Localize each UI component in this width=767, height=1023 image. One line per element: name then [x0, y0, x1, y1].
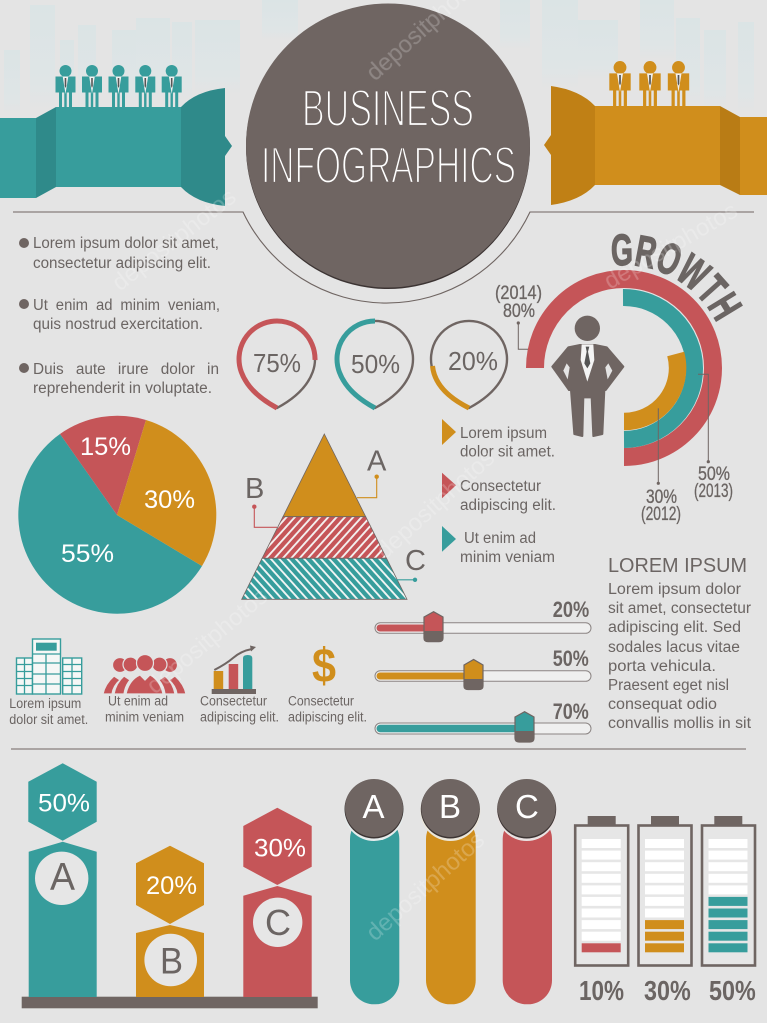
pin gauge 75%	[239, 321, 315, 408]
label C: C	[405, 545, 426, 577]
pie chart: 30%	[144, 486, 195, 514]
slider 70%	[375, 699, 591, 742]
battery 10%: 10%	[579, 975, 624, 1006]
tube C	[497, 779, 557, 1004]
2013 label: (2013)	[694, 481, 733, 502]
tube C: C	[515, 788, 539, 825]
icon: bar chart with arrow: Consectetur	[200, 694, 267, 709]
icon: dollar sign: $	[312, 640, 336, 693]
pin gauge 50%	[337, 321, 413, 408]
icon: dollar sign: adipiscing elit.	[288, 710, 367, 725]
triangle list: dolor sit amet.	[460, 444, 555, 461]
2012 label: (2012)	[641, 504, 681, 525]
2014 label: 80%	[503, 301, 535, 322]
growth chart	[495, 234, 743, 525]
2014 ring	[535, 279, 713, 457]
slider 50%	[375, 646, 591, 690]
icon: people group: minim veniam	[105, 710, 184, 725]
label B: B	[245, 473, 264, 505]
column A	[28, 763, 97, 997]
lorem ipsum text block: porta vehicula.	[608, 658, 716, 675]
column C: 30%	[254, 835, 306, 863]
slider 50%: 50%	[553, 646, 589, 671]
2012 ring	[624, 354, 678, 422]
stock watermark: depositphotos	[107, 183, 241, 297]
battery 50%	[702, 816, 756, 1006]
band tail	[0, 118, 36, 198]
battery 50%: 50%	[709, 975, 756, 1006]
title	[261, 80, 516, 195]
icon: office building	[9, 639, 88, 727]
businessman icon	[552, 316, 623, 436]
bullet list: reprehenderit in voluptate.	[33, 380, 212, 397]
lorem ipsum text block: consequat odio	[608, 696, 717, 713]
slider 70%: 70%	[553, 699, 589, 724]
column B: 20%	[146, 872, 197, 900]
title: INFOGRAPHICS	[261, 137, 516, 195]
stock watermark: depositphotos	[371, 444, 500, 564]
lorem ipsum text block: Lorem ipsum dolor	[608, 581, 741, 598]
column A: 50%	[38, 790, 90, 818]
left teal banner with team	[0, 65, 232, 206]
title: BUSINESS	[302, 80, 474, 138]
lorem ipsum text block: LOREM IPSUM	[608, 555, 747, 577]
column A: A	[50, 856, 75, 899]
pin gauge 50%: 50%	[351, 349, 400, 379]
2013 label	[694, 374, 733, 502]
triangle list: Consectetur	[460, 478, 541, 495]
band fold	[36, 107, 56, 198]
label B	[245, 473, 277, 527]
icon: bar chart with arrow: adipiscing elit.	[200, 710, 279, 725]
band main	[595, 106, 720, 185]
bullet list: Duis aute irure dolor in	[33, 361, 219, 378]
stock watermark: depositphotos	[600, 197, 742, 295]
stock watermark	[107, 0, 742, 946]
pie chart: 15%	[80, 433, 131, 461]
teal team	[56, 65, 182, 107]
pin gauge 75%: 75%	[253, 348, 301, 378]
slider 20%	[375, 597, 591, 642]
bullet list: Ut enim ad minim veniam,	[33, 297, 220, 314]
pyramid chart	[242, 434, 426, 599]
pin gauge 20%: 20%	[448, 346, 498, 376]
pie chart	[18, 416, 216, 614]
2012 label	[641, 408, 681, 525]
2014 label	[495, 283, 542, 349]
pin gauge 20%	[431, 321, 507, 408]
tube A	[344, 779, 404, 1004]
header divider with arc	[13, 212, 754, 303]
hexagon bar chart	[22, 763, 318, 1008]
band fold	[720, 106, 740, 195]
2013 label: 50%	[698, 464, 730, 485]
lorem ipsum text block: adipiscing elit. Sed	[608, 619, 741, 636]
slider 20%: 20%	[553, 597, 589, 622]
triangle list: Lorem ipsum	[460, 425, 547, 442]
triangle list: minim veniam	[460, 549, 555, 566]
2013 ring	[623, 297, 695, 440]
band cap	[544, 86, 595, 205]
icon: people group: Ut enim ad	[108, 694, 168, 709]
band main	[56, 107, 182, 187]
label C	[397, 545, 426, 582]
label A	[357, 446, 387, 498]
bullet list	[19, 235, 220, 397]
label A: A	[367, 446, 387, 478]
battery 30%	[638, 816, 692, 1006]
gold team	[609, 61, 689, 106]
icon: office building: dolor sit amet.	[9, 712, 88, 727]
column C: C	[265, 902, 291, 943]
icon: dollar sign: Consectetur	[288, 694, 354, 709]
stock watermark: depositphotos	[361, 826, 490, 946]
bullet list: Lorem ipsum dolor sit amet,	[33, 235, 219, 252]
column B	[136, 846, 204, 997]
2012 label: 30%	[646, 487, 677, 508]
band cap	[181, 88, 232, 206]
lorem ipsum text block: sit amet, consectetur	[608, 600, 751, 617]
tube B	[420, 779, 480, 1004]
triangle list: adipiscing elit.	[460, 497, 556, 514]
2014 label: (2014)	[495, 283, 542, 304]
baseline	[22, 997, 318, 1008]
lorem ipsum text block: convallis mollis in sit	[608, 715, 752, 732]
icon: people group	[103, 654, 186, 725]
battery 10%	[575, 816, 628, 1006]
battery 30%: 30%	[644, 975, 691, 1006]
stock watermark: depositphotos	[142, 583, 273, 700]
background city skyline	[4, 0, 754, 115]
right gold banner with team	[544, 61, 767, 205]
bullet list: quis nostrud exercitation.	[33, 316, 203, 333]
column C	[243, 808, 312, 997]
growth heading: GROWTH	[612, 234, 743, 322]
lorem ipsum text block: Praesent eget nisl	[608, 677, 729, 694]
triangle list	[442, 419, 556, 566]
bullet list: consectetur adipiscing elit.	[33, 255, 211, 272]
tube B: B	[439, 788, 461, 825]
pie chart: 55%	[61, 540, 114, 568]
column B: B	[160, 940, 183, 981]
tube A: A	[362, 788, 385, 825]
icon: office building: Lorem ipsum	[9, 696, 81, 711]
lorem ipsum text block: sodales lacus vitae	[608, 639, 740, 656]
title circle	[246, 4, 530, 289]
band tail	[740, 117, 767, 195]
icon: dollar sign	[288, 640, 367, 725]
triangle list: Ut enim ad	[464, 530, 536, 547]
icon: bar chart with arrow	[200, 646, 279, 725]
lorem ipsum text block	[608, 555, 752, 732]
